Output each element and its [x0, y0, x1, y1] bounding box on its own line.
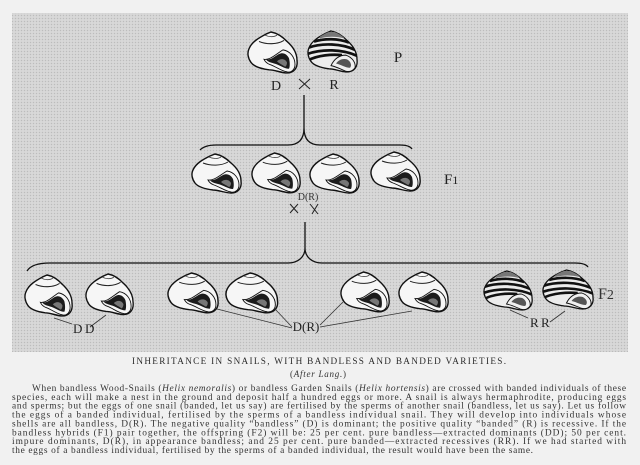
generation P parents [248, 31, 402, 94]
body text: and sperms; but the eggs of one snail (banded, let us say) are fertilised by the sperms of another snail (bandless, let us say). Let us follow [12, 400, 626, 412]
body text: When bandless Wood-Snails (Helix nemoralis) or bandless Garden Snails (Helix hortensis) are crossed with banded individuals of these [32, 383, 626, 394]
icon: F2 snail DR 2 [226, 273, 278, 313]
icon: F2 snail DR 4 [399, 272, 448, 312]
label DD: DD [73, 321, 94, 336]
generation F1 [192, 152, 458, 214]
label D: D [271, 79, 281, 94]
body text: the eggs of a banded individual, fertilised by the sperms of a bandless individual snail. They will develop into individuals whose [12, 410, 626, 420]
icon: F2 snail DR 1 [168, 273, 218, 313]
panel: diagram plate [12, 13, 628, 352]
icon: F1 snail 1 [192, 154, 241, 193]
heading: INHERITANCE IN SNAILS, WITH BANDLESS AND BANDED VARIETIES. [132, 356, 506, 366]
icon: F2 snail DD 1 [25, 275, 72, 316]
body text: species, each will make a nest in the ground and deposit half a hundred eggs or more. A snail is always hermaphrodite, producing eggs [12, 392, 626, 403]
label R: R [329, 78, 339, 93]
label F1: F1 [444, 172, 458, 188]
brace: P to F1 [200, 95, 412, 150]
label RR: RR [530, 315, 550, 330]
leader lines [54, 302, 565, 328]
cross symbol [299, 79, 310, 89]
generation F2 [25, 270, 614, 336]
label F2: F2 [598, 286, 614, 303]
body text: impure dominants, D(R), in appearance bandless; and 25 per cent. pure banded—extracted recessives (RR). If we had started with [12, 436, 626, 447]
label P: P [394, 50, 402, 66]
body text: the eggs of a bandless individual, fertilised by the sperms of a banded individual, the result would have been the same. [12, 445, 533, 456]
icon: F2 snail RR 1 [483, 271, 533, 310]
label D(R): D(R) [293, 319, 319, 334]
cross symbols [290, 204, 318, 214]
brace: F1 to F2 [27, 222, 588, 271]
body text: shells are all bandless, D(R). The negative quality “bandless” (D) is dominant; the positive quality “banded” (R) is recessive. If the [12, 418, 626, 430]
icon: F2 snail DD 2 [86, 274, 133, 315]
icon: bandless snail D [248, 32, 297, 73]
icon: F2 snail DR 3 [341, 272, 389, 312]
icon: F1 snail 3 [310, 154, 359, 193]
icon: F1 snail 4 [371, 152, 420, 191]
label D(R): D(R) [298, 192, 318, 203]
attribution: (After Lang.) [290, 369, 346, 379]
icon: F2 snail RR 2 [542, 270, 594, 309]
body text: bandless hybrids (F1) pair together, the offspring (F2) will be: 25 per cent. pure bandless—extracted dominants (DD); 50 per cent. [12, 428, 626, 438]
icon: F1 snail 2 [252, 153, 300, 193]
icon: banded snail R [307, 31, 358, 72]
body text [12, 383, 626, 456]
